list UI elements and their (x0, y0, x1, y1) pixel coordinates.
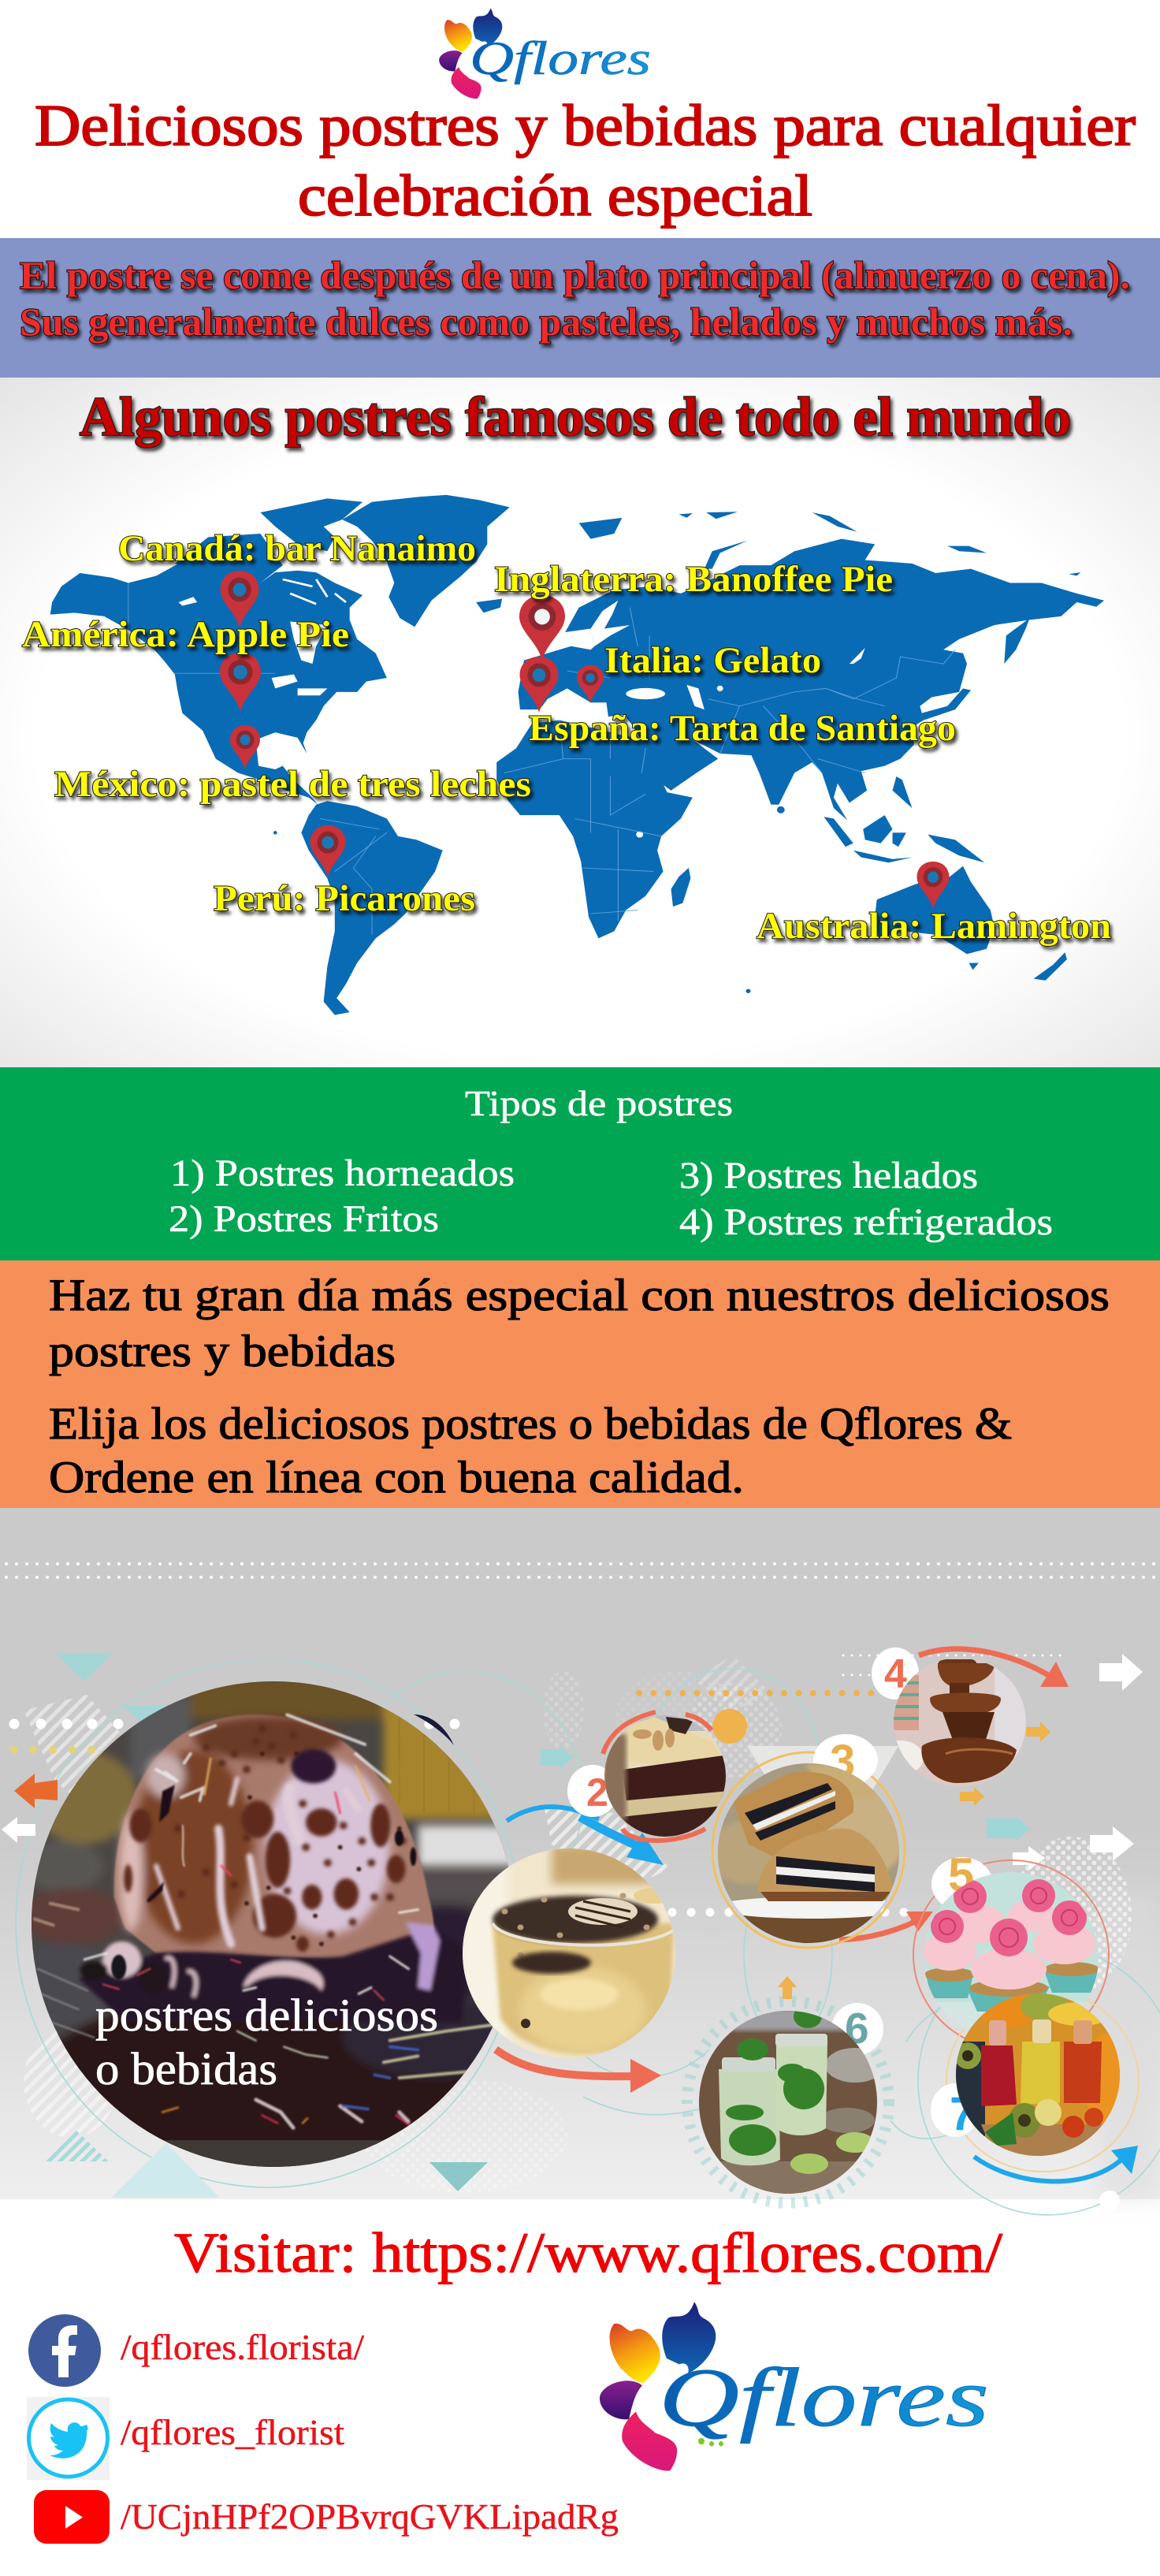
intro text (20, 253, 1130, 344)
panel: types of desserts (0, 1067, 1160, 1260)
title: Deliciosos postres y bebidas para cualquier (35, 94, 1136, 158)
icon: twitter bird (50, 2422, 88, 2459)
logo flower (600, 2302, 723, 2471)
number badge 6: 6 (845, 2004, 869, 2053)
website link: Visitar: https://www.qflores.com/ (174, 2221, 1002, 2284)
intro text: Sus generalmente dulces como pasteles, helados y muchos más. (20, 300, 1073, 344)
number badge 5: 5 (948, 1848, 974, 1901)
map labels: Australia: Lamington (757, 906, 1111, 947)
logo flower (439, 9, 502, 99)
map labels: Canadá: bar Nanaimo (118, 528, 476, 569)
pin: Mexico (230, 725, 260, 769)
social: youtube: /UCjnHPf2OPBvrqGVKLipadRg (121, 2496, 619, 2537)
decorative arrows (2, 1654, 1143, 1999)
pin: Australia (917, 862, 949, 909)
photo caption (95, 1990, 438, 2094)
logo wordmark: Qflores (470, 32, 651, 84)
number badge 7 (931, 2083, 980, 2140)
social: facebook: /qflores.florista/ (121, 2327, 364, 2367)
decorative dots (9, 1655, 1120, 2211)
types list: 1) Postres horneados (170, 1152, 515, 1194)
photo: mojito glasses (699, 2011, 877, 2194)
accent behind main photo (414, 1714, 454, 1745)
call to action text (49, 1271, 1110, 1502)
number badge 4 (872, 1647, 919, 1699)
types list (169, 1152, 1053, 1243)
photo: ice cream with sauce (32, 1681, 509, 2167)
call to action text: Elija los deliciosos postres o bebidas de Qflores & (49, 1399, 1012, 1449)
photo: chocolate cake (603, 1712, 729, 1841)
map labels: México: pastel de tres leches (54, 764, 531, 805)
photo: oreo cookies (718, 1763, 899, 1943)
number badge 3: 3 (830, 1736, 855, 1787)
number badge 4: 4 (884, 1651, 907, 1697)
decorative triangles (44, 1653, 898, 2198)
title (35, 94, 1136, 229)
pin: Italy (577, 665, 604, 703)
photo caption: postres deliciosos (95, 1990, 438, 2041)
map labels: Perú: Picarones (214, 878, 475, 919)
social: twitter (27, 2397, 344, 2480)
social: twitter: /qflores_florist (121, 2412, 344, 2452)
number badge 6 (831, 2003, 883, 2055)
number badge 7: 7 (950, 2087, 976, 2140)
call to action text: Ordene en línea con buena calidad. (49, 1453, 744, 1502)
top logo (439, 9, 651, 99)
pin: America (220, 653, 261, 712)
types heading: Tipos de postres (465, 1083, 733, 1123)
social: youtube (34, 2490, 619, 2544)
panel: intro (0, 238, 1160, 378)
photo: dessert cup (461, 1845, 686, 2061)
title: celebración especial (298, 164, 812, 229)
number badge 3 (813, 1734, 878, 1787)
intro text: El postre se come después de un plato principal (almuerzo o cena). (20, 253, 1130, 297)
curved arrows (496, 1649, 1139, 2181)
map labels: Inglaterra: Banoffee Pie (494, 559, 893, 600)
panel: call to action (0, 1260, 1160, 1508)
number badge 5 (931, 1848, 993, 1911)
call to action text: postres y bebidas (49, 1327, 396, 1376)
map heading: Algunos postres famosos de todo el mundo (80, 387, 1071, 448)
map labels: Italia: Gelato (604, 640, 821, 681)
bottom logo (600, 2302, 989, 2471)
types list: 2) Postres Fritos (169, 1198, 439, 1240)
pin: Peru (310, 825, 345, 877)
world map: Americas (50, 495, 510, 1015)
types list: 3) Postres helados (679, 1155, 978, 1197)
panel: dessert collage (0, 1508, 1160, 2215)
icon: play triangle (65, 2506, 83, 2529)
logo wordmark: Qflores (659, 2351, 989, 2444)
pin: Spain (520, 657, 558, 713)
social: facebook (28, 2314, 364, 2387)
photo caption: o bebidas (95, 2043, 277, 2094)
types list: 4) Postres refrigerados (679, 1201, 1053, 1243)
map labels: América: Apple Pie (22, 614, 349, 655)
map labels (22, 528, 1111, 947)
pin: England (519, 595, 565, 661)
number badge 2: 2 (586, 1770, 608, 1815)
icon: facebook f (52, 2325, 77, 2377)
photo: rose cupcakes (924, 1872, 1099, 2031)
call to action text: Haz tu gran día más especial con nuestros deliciosos (49, 1271, 1110, 1320)
photo: chocolate fountain (894, 1658, 1026, 1787)
photo: fruit juices (956, 1993, 1120, 2156)
panel: world map (0, 378, 1160, 1067)
number badge 2 (567, 1765, 618, 1817)
world map: Old World (496, 512, 1104, 993)
map labels: España: Tarta de Santiago (529, 708, 956, 749)
pin: Canada (221, 571, 258, 628)
